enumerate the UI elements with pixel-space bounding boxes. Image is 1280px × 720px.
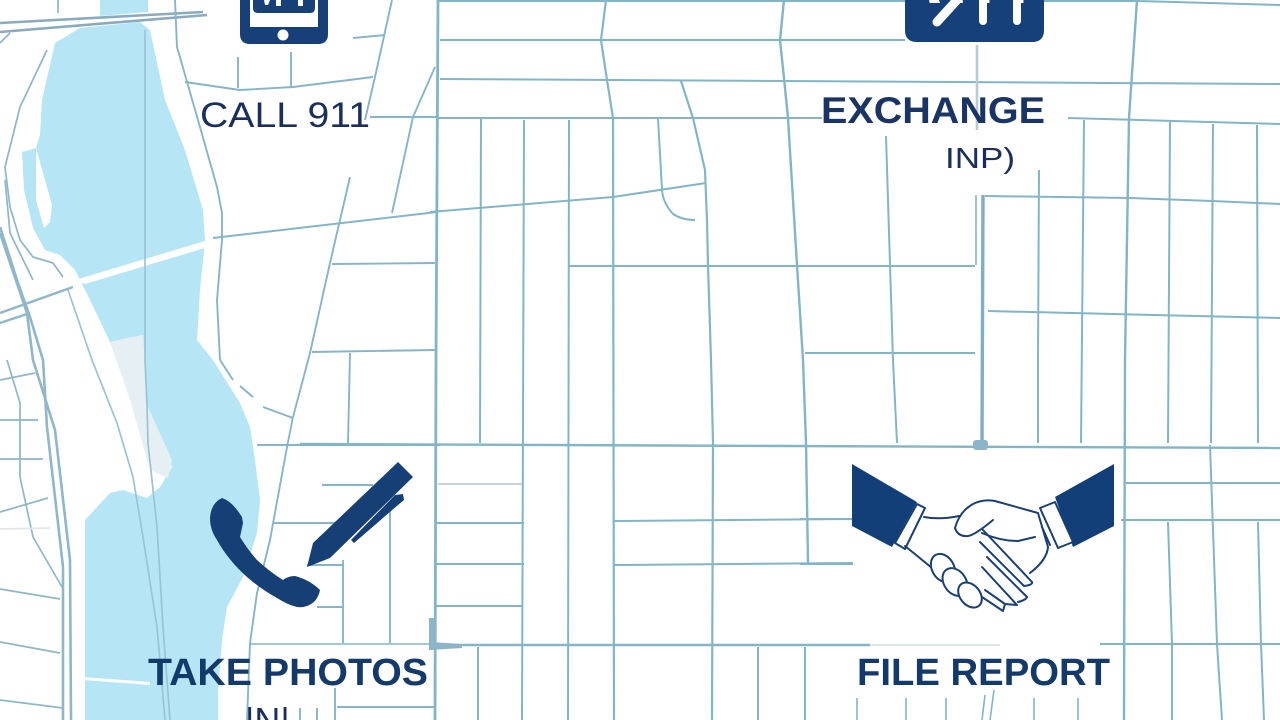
street map: centre-left roads: [175, 0, 440, 720]
heading: file report: FILE REPORT: [857, 652, 1110, 694]
icon: telephone handset: [210, 498, 320, 607]
road junction markers: [429, 440, 988, 650]
river water: [22, 0, 260, 720]
street map: left side roads: [0, 0, 207, 720]
heading: take photos: TAKE PHOTOS: [148, 652, 428, 694]
street map: centre grid: [300, 0, 1280, 720]
icon: handshake: [852, 450, 1121, 642]
text: exchange sub-label: INP): [945, 143, 1015, 175]
icon: smartphone: [240, 0, 328, 44]
heading: exchange: EXCHANGE: [821, 90, 1045, 131]
street map: right grid: [805, 0, 1280, 720]
heading: call 911: CALL 911: [200, 96, 370, 135]
icon: pen: [307, 462, 413, 567]
